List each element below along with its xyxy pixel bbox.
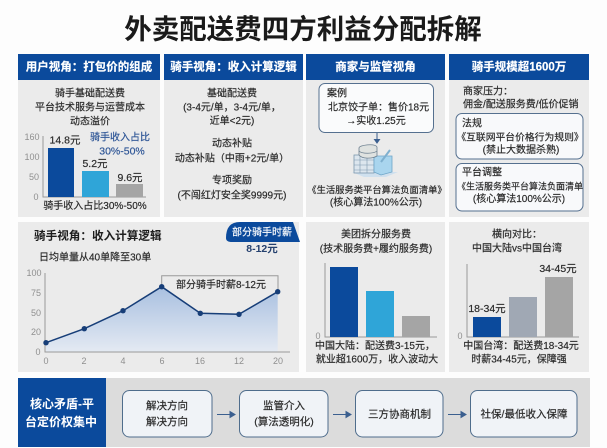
bar chart: fee composition: 30%-50% — [99, 146, 145, 158]
line chart: 0 — [43, 356, 49, 366]
panel: cross-region comparison — [449, 222, 589, 372]
bar chart: service fee: 0 — [315, 331, 321, 341]
panel: Meituan service fee — [306, 222, 445, 372]
line chart: 部分骑手时薪8-12元 — [176, 278, 266, 291]
text: special bonus — [178, 174, 286, 202]
step: tripartite negotiation — [356, 390, 443, 437]
line chart: 12 — [234, 356, 244, 366]
step: regulatory intervention: (算法透明化) — [254, 415, 314, 428]
text: mainland China: 中国大陆：配送费3-15元， — [315, 339, 435, 352]
header: rider income logic — [164, 54, 303, 80]
callout: platform adjustment — [456, 164, 583, 211]
arrow: case to icon — [374, 133, 380, 143]
text: Meituan split: (技术服务费+履约服务费) — [320, 242, 432, 255]
step: regulatory intervention — [240, 390, 328, 437]
step: social insurance — [470, 390, 577, 437]
arrow — [217, 412, 235, 418]
line chart: 16 — [195, 356, 205, 366]
line chart: 75 — [31, 288, 41, 298]
text: merchant pressure: 佣金/配送服务费/低价促销 — [463, 98, 579, 110]
tag: hourly wage: 部分骑手时薪 — [232, 226, 292, 238]
heading: rider income logic: 骑手视角：收入计算逻辑 — [34, 228, 162, 242]
text: fee components — [35, 86, 145, 128]
text: base delivery fee: (3-4元/单，3-4元/单， — [183, 102, 281, 114]
text: negative list: 《生活服务类平台算法负面清单》 — [307, 184, 447, 195]
bar chart: fee composition: 160 — [24, 132, 40, 142]
line chart: 2 — [81, 356, 87, 366]
line chart: 20 — [273, 356, 283, 366]
line chart: 6 — [159, 356, 165, 366]
panel: core conflict and solutions — [18, 378, 590, 447]
callout: platform adjustment: 《生活服务类平台算法负面清单 — [457, 180, 583, 192]
step: solution direction — [122, 390, 212, 437]
tag: hourly wage — [226, 222, 300, 255]
bar chart: fee composition: 骑手收入占比 — [90, 130, 150, 144]
bar chart: fee composition: 50 — [29, 172, 39, 182]
text: base delivery fee — [183, 86, 281, 127]
line chart: 4 — [120, 356, 126, 366]
text: comparison heading — [472, 228, 562, 254]
bar chart: fee composition: 14.8元 — [50, 134, 81, 146]
header: rider scale — [449, 54, 589, 80]
header: user perspective: 用户视角：打包价的组成 — [26, 60, 153, 74]
bar chart: service fee — [315, 263, 437, 341]
text: merchant pressure: 商家压力： — [463, 84, 513, 98]
icon: stacked data and document — [352, 145, 398, 177]
line chart: 100 — [26, 268, 42, 278]
tag: hourly wage: 8-12元 — [246, 243, 278, 255]
text: negative list: (核心算法100%公示) — [330, 196, 422, 208]
bar chart: fee composition: 0 — [33, 192, 39, 202]
text: special bonus: 专项奖励 — [212, 174, 252, 186]
callout: case study: 北京饺子单：售价18元 — [328, 100, 429, 114]
header: merchant and regulator — [306, 54, 445, 80]
callout: regulation: 法规 — [462, 116, 482, 130]
text: special bonus: (不闯红灯安全奖9999元) — [178, 188, 286, 202]
bar chart: comparison: 18-34元 — [468, 303, 506, 315]
text: mainland China — [315, 339, 438, 366]
header: user perspective — [18, 54, 160, 80]
bar chart: fee composition: 100 — [24, 152, 40, 162]
callout: regulation: (禁止大数据杀熟) — [483, 143, 559, 156]
text: Taiwan: 中国台湾：配送费18-34元 — [463, 339, 579, 352]
text: comparison heading: 横向对比： — [492, 228, 542, 240]
bar chart: fee composition: 5.2元 — [82, 158, 108, 170]
line chart: 20 — [31, 327, 41, 337]
text: dynamic subsidy — [175, 136, 289, 164]
text: merchant pressure — [463, 84, 579, 110]
text: Meituan split — [320, 228, 432, 255]
step: solution direction: 解决方向 — [146, 415, 188, 428]
bar chart: comparison: 0 — [457, 331, 463, 341]
arrow — [448, 412, 466, 418]
callout: regulation — [456, 114, 584, 159]
callout: case study — [319, 84, 434, 132]
text: fee components: 平台技术服务与运营成本 — [35, 100, 145, 114]
callout: regulation: 《互联网平台价格行为规则》 — [456, 130, 584, 144]
header: merchant and regulator: 商家与监管视角 — [335, 60, 416, 74]
text: Meituan split: 美团拆分服务费 — [341, 228, 411, 240]
text: dynamic subsidy: 动态补贴 — [212, 136, 252, 150]
text: base delivery fee: 近单<2元) — [210, 114, 254, 127]
title: 外卖配送费四方利益分配拆解 — [124, 14, 482, 44]
bar chart: comparison — [457, 263, 579, 341]
callout: case study: 案例 — [327, 86, 347, 100]
panel: daily orders line chart — [18, 222, 300, 372]
text: dynamic subsidy: 动态补贴（中雨+2元/单） — [175, 152, 289, 164]
text: Taiwan — [463, 339, 579, 366]
header: rider income logic: 骑手视角：收入计算逻辑 — [170, 60, 297, 74]
callout: case study: →实收1.25元 — [346, 114, 406, 127]
callout: platform adjustment: 平台调整 — [462, 166, 502, 178]
step: regulatory intervention: 监管介入 — [263, 399, 305, 412]
label: core conflict — [18, 378, 106, 447]
header: rider scale: 骑手规模超1600万 — [472, 60, 566, 74]
callout: platform adjustment: (核心算法100%公示) — [473, 192, 565, 205]
text: Taiwan: 时薪34-45元，保障强 — [471, 352, 567, 366]
panel: user perspective — [18, 54, 160, 217]
text: base delivery fee: 基础配送费 — [207, 86, 257, 100]
line chart: 50 — [31, 308, 41, 318]
bar chart: fee composition — [24, 130, 150, 202]
panel: rider income logic — [164, 54, 303, 217]
text: fee components: 骑手基础配送费 — [55, 86, 125, 100]
bar chart: fee composition: 9.6元 — [117, 172, 143, 184]
bar chart: comparison: 34-45元 — [539, 263, 577, 275]
arrow — [333, 412, 351, 418]
caption: rider income share: 骑手收入占比30%-50% — [43, 199, 147, 212]
text: negative list — [307, 184, 447, 208]
text: mainland China: 就业超1600万，收入波动大 — [316, 352, 438, 366]
text: fee components: 动态溢价 — [70, 114, 110, 128]
line chart — [26, 268, 290, 366]
label: core conflict: 核心矛盾-平 — [30, 396, 94, 411]
text: comparison heading: 中国大陆vs中国台湾 — [472, 242, 562, 254]
panel: rider scale — [449, 54, 589, 217]
line chart: 0 — [35, 347, 41, 357]
step: social insurance: 社保/最低收入保障 — [481, 408, 568, 420]
subheading: daily orders: 日均单量从40单降至30单 — [39, 250, 151, 264]
step: solution direction: 解决方向 — [146, 399, 188, 412]
step: tripartite negotiation: 三方协商机制 — [368, 408, 431, 420]
label: core conflict: 台定价权集中 — [25, 414, 97, 429]
panel: merchant and regulator — [306, 54, 447, 217]
